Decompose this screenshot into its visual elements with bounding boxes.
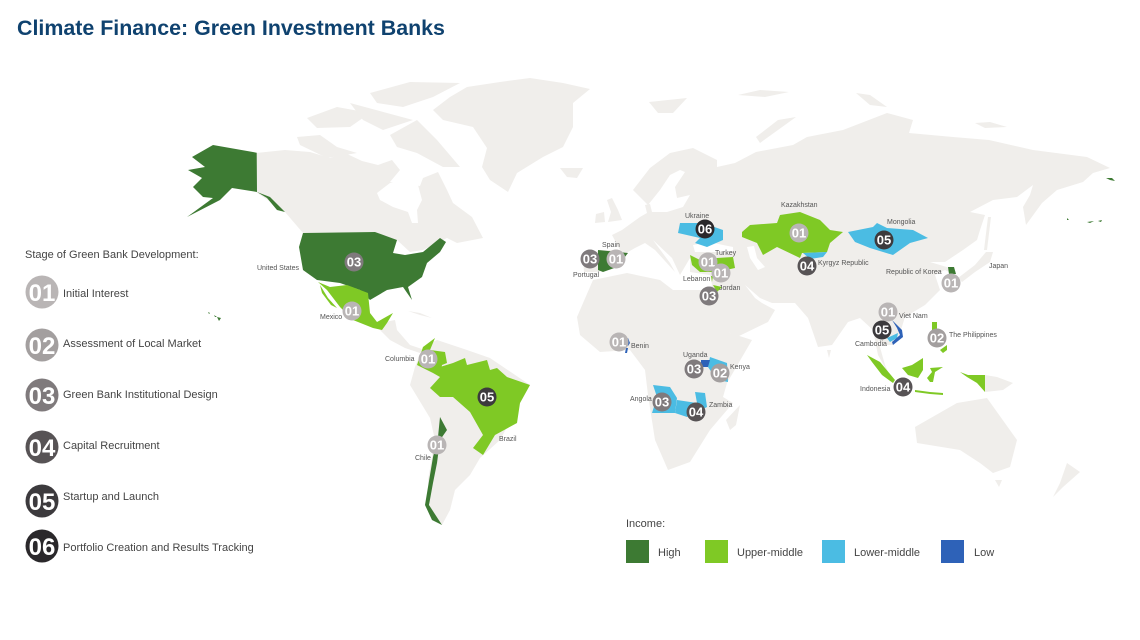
stage 01: Initial Interest [63,288,128,300]
stage 01 [26,276,128,308]
map stage badges: 03 [655,394,669,410]
map stage badges: 02 [713,366,727,380]
map stage badges: 03 [702,288,716,304]
income: upper-middle [705,540,803,563]
country labels: Republic of Korea [886,269,942,276]
map stage badges: 04 [896,380,911,394]
country labels: Columbia [385,356,415,363]
stage 02: Assessment of Local Market [63,338,201,350]
country labels: Mexico [320,314,342,321]
map stage badges: 01 [430,438,444,452]
map stage badges: 01 [714,266,728,280]
map stage badges: 03 [347,254,361,270]
country labels: The Philippines [949,332,997,339]
map stage badges: 06 [698,222,712,236]
map stage badges: 01 [881,304,895,320]
map stage badges: 03 [687,362,701,376]
stage 03 [26,378,218,412]
base land masses [256,78,1110,525]
map stage badges: 01 [792,226,806,240]
high income countries [187,145,1115,525]
inland seas [377,180,765,270]
income: low [941,540,994,563]
income: low: Low [974,547,994,559]
country labels: Benin [631,343,649,350]
upper-middle income countries [318,212,985,455]
stage 05: 05 [29,489,55,516]
stage 04: 04 [29,435,56,462]
stage 04 [26,430,160,464]
stage 05: Startup and Launch [63,491,159,503]
country labels: Brazil [499,436,517,443]
stage 05 [26,484,159,518]
country labels: Kazakhstan [781,202,818,209]
stage 06: 06 [29,534,55,561]
country labels: Cambodia [855,341,887,348]
lower-middle income countries [652,223,928,417]
stage 02 [26,328,201,362]
country labels: Uganda [683,352,708,359]
map stage badges: 01 [944,276,958,290]
stage legend heading: Stage of Green Bank Development: [25,249,199,261]
stage 04: Capital Recruitment [63,440,160,452]
stage 01: 01 [29,280,55,307]
country labels: Ukraine [685,213,709,220]
country labels: Viet Nam [899,313,928,320]
country labels: Japan [989,263,1008,270]
map stage badges: 05 [877,232,891,248]
country labels: Jordan [719,285,741,292]
country labels [257,202,1008,462]
map stage badges: 05 [875,322,889,338]
stage legend [25,249,254,562]
stage 06 [26,530,254,562]
country labels: United States [257,265,300,272]
income: lower-middle: Lower-middle [854,547,920,559]
country labels: Spain [602,242,620,249]
country labels: Lebanon [683,276,710,283]
income: lower-middle [822,540,920,563]
country labels: Zambia [709,402,732,409]
income legend heading: Income: [626,518,665,530]
country labels: Portugal [573,272,600,279]
map stage badges [342,220,960,454]
map stage badges: 01 [701,254,715,270]
map stage badges: 04 [689,404,704,420]
country labels: Kenya [730,364,750,371]
country labels: Turkey [715,250,737,257]
map stage badges: 04 [800,258,815,274]
income legend [626,518,994,563]
stage 06: Portfolio Creation and Results Tracking [63,542,254,554]
income: high [626,540,681,563]
country labels: Chile [415,455,431,462]
stage 03: 03 [29,383,55,410]
country labels: Kyrgyz Republic [818,260,869,267]
title: Climate Finance: Green Investment Banks [17,16,445,40]
map stage badges: 05 [480,390,494,404]
stage 03: Green Bank Institutional Design [63,389,218,401]
country labels: Indonesia [860,386,890,393]
country labels: Mongolia [887,219,916,226]
map stage badges: 01 [609,252,623,266]
income: high: High [658,547,681,559]
map stage badges: 01 [345,304,359,318]
country labels: Angola [630,396,652,403]
map stage badges: 01 [612,334,626,350]
world map [187,78,1115,525]
income: upper-middle: Upper-middle [737,547,803,559]
map stage badges: 01 [421,352,435,366]
stage 02: 02 [29,333,55,360]
map stage badges: 02 [930,330,944,346]
low income countries [625,320,903,367]
map stage badges: 03 [583,252,597,266]
